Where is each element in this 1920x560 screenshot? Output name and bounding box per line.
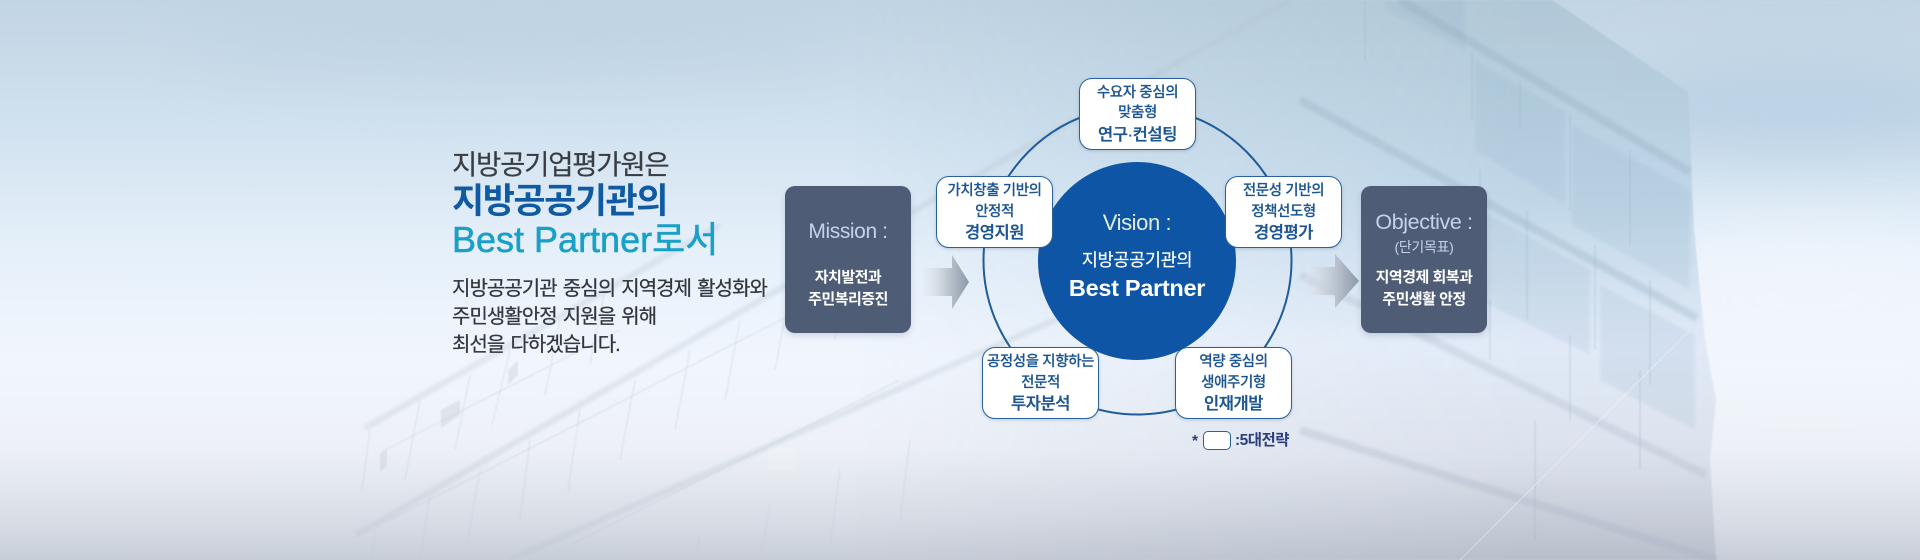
strategy box: left: 가치창출 기반의 — [947, 183, 1042, 199]
strategy box: bottom left: 투자분석 — [1011, 395, 1070, 413]
arrow: mission to vision — [929, 255, 969, 309]
title line 1: 지방공기업평가원은 — [452, 149, 668, 180]
text block: intro description: 주민생활안정 지원을 위해 — [452, 306, 656, 328]
strategy box: top: 연구·컨설팅 — [1098, 126, 1177, 144]
strategy box: top — [1079, 78, 1196, 150]
building facade: floor bands right — [1300, 0, 1716, 560]
building facade: floor bands left — [356, 0, 1290, 560]
title line 3: Best Partner로서 — [452, 219, 718, 260]
strategy box: right: 경영평가 — [1254, 224, 1313, 242]
strategy box: bottom left: 공정성을 지향하는 — [987, 354, 1094, 370]
title line 2: 지방공공기관의 — [452, 182, 667, 221]
building body — [1032, 0, 1716, 560]
vision emphasis: Best Partner — [1069, 275, 1205, 301]
strategy box: left: 안정적 — [975, 204, 1014, 220]
strategy box: left — [936, 176, 1053, 248]
strategy box: bottom left: 전문적 — [1021, 375, 1060, 391]
circle: vision — [1038, 162, 1236, 360]
mission heading: Mission : — [808, 220, 888, 243]
mission text: 자치발전과 — [815, 269, 881, 286]
objective text — [1376, 269, 1473, 308]
strategy box: left: 경영지원 — [965, 224, 1024, 242]
strategy box: right — [1225, 176, 1342, 248]
legend: five strategies: :5대전략 — [1235, 432, 1289, 449]
ring: strategy orbit — [982, 117, 1292, 416]
objective heading: Objective : — [1375, 210, 1473, 234]
mission text: 주민복리증진 — [808, 291, 888, 308]
legend: five strategies: * — [1192, 433, 1198, 450]
strategy box: right: 전문성 기반의 — [1243, 183, 1324, 199]
legend: five strategies — [1192, 431, 1290, 450]
panel: objective — [1361, 186, 1487, 333]
objective text: 주민생활 안정 — [1382, 291, 1466, 308]
heading: intro title — [452, 149, 718, 260]
text block: intro description — [452, 278, 768, 356]
text block: intro description: 지방공공기관 중심의 지역경제 활성화와 — [452, 278, 767, 300]
strategy box: top: 수요자 중심의 — [1097, 85, 1178, 101]
strategy box: top: 맞춤형 — [1118, 105, 1157, 121]
strategy box: right: 정책선도형 — [1251, 204, 1316, 220]
strategy box: bottom left — [982, 347, 1099, 419]
objective text: 지역경제 회복과 — [1376, 269, 1472, 286]
strategy box: bottom right: 인재개발 — [1204, 395, 1263, 413]
vision heading: Vision : — [1103, 210, 1171, 235]
mission text — [808, 269, 888, 308]
building facade: windows — [1385, 0, 1695, 430]
strategy box: bottom right — [1175, 347, 1292, 419]
arrow: vision to objective — [1314, 254, 1359, 308]
strategy box: bottom right: 생애주기형 — [1201, 375, 1266, 391]
objective note: (단기목표) — [1394, 239, 1454, 255]
vision text: 지방공공기관의 — [1082, 250, 1192, 270]
text block: intro description: 최선을 다하겠습니다. — [452, 334, 620, 356]
strategy box: bottom right: 역량 중심의 — [1199, 354, 1268, 370]
panel: mission — [785, 186, 911, 333]
